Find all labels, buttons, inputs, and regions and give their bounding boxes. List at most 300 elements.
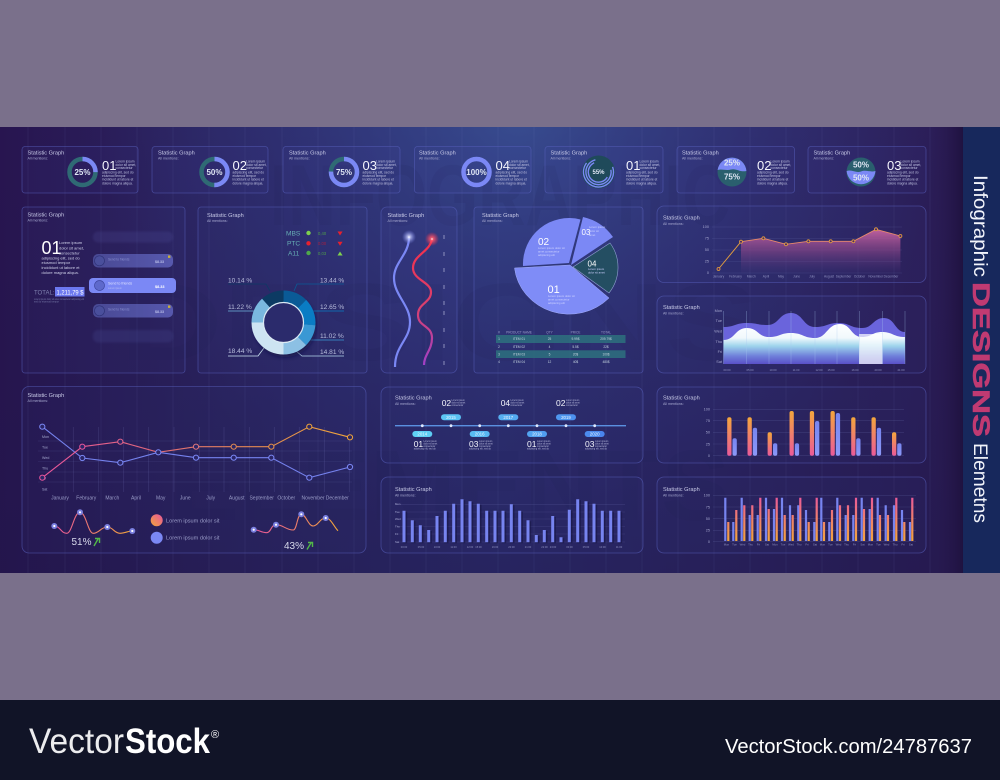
footer logo: ® — [211, 729, 219, 741]
line chart: December — [326, 496, 349, 502]
milestone texts: 02 — [442, 398, 451, 408]
year pills: 2018 — [532, 432, 542, 437]
thin bars: Fri — [853, 543, 857, 547]
line chart: March — [105, 496, 119, 502]
text block 01: adipiscing elit, sed do — [102, 170, 134, 174]
bars: 16:00 — [492, 545, 499, 549]
text block 01: incididunt ut labore et — [42, 265, 80, 270]
product table: 3 — [498, 352, 500, 356]
text block 01: dolore magna aliqua. — [626, 181, 657, 185]
thin bars: Thu — [748, 543, 753, 547]
product table: ITEM 03 — [513, 352, 525, 356]
wave gauge 50% 50%: 50% — [853, 160, 869, 170]
donut 75%: 75% — [336, 168, 352, 177]
product table: TOTAL — [601, 330, 611, 334]
wave gauge 25% 75%: 75% — [724, 172, 740, 182]
text block 04: eiusmod tempor — [496, 174, 520, 178]
donut 25%: 25% — [74, 168, 91, 177]
panel: wave gauge 25/75: All mentions: — [682, 156, 703, 160]
text block 02: 02 — [757, 158, 771, 173]
thin bars — [704, 494, 916, 547]
legend: Lorem ipsum dolor sit — [166, 536, 220, 542]
text block 01: dolor sit amet, — [640, 163, 660, 167]
product table: 1 — [498, 337, 500, 341]
panel: ring 25%: Statistic Graph — [28, 150, 64, 156]
area chart: 100 — [703, 225, 709, 229]
top grey band — [0, 0, 1000, 127]
text block 01: consectetur — [116, 166, 133, 170]
pie chart: 01 — [548, 284, 560, 296]
panel: area line chart — [657, 206, 926, 282]
pie chart: 03 — [582, 228, 591, 237]
milestone texts: consectetur — [537, 445, 549, 448]
status table — [286, 230, 343, 258]
panel: wave chart: All mentions: — [663, 312, 684, 316]
list row 2: $8.33 — [155, 260, 164, 264]
product table: 5.5$ — [572, 345, 579, 349]
thin bars: Mon — [820, 543, 826, 547]
text block 03: dolore magna aliqua. — [887, 181, 918, 185]
bars — [395, 499, 625, 549]
right sidebar with vertical title: DESIGNS — [967, 282, 994, 437]
pie chart: Lorem ipsum dolor sit — [538, 246, 565, 250]
thin bars: 100 — [704, 494, 710, 498]
ghost background lettering: ELEMENTS — [170, 430, 730, 542]
text block 02: incididunt ut labore et — [757, 178, 788, 182]
text block 01: dolore magna aliqua. — [42, 270, 79, 275]
panel: bar chart single series: Statistic Graph — [395, 487, 432, 493]
year pills: 2019 — [561, 415, 571, 420]
status table: 0,03 — [318, 251, 327, 256]
milestone texts — [414, 398, 609, 450]
product table: 25 — [548, 337, 551, 341]
wave gauge 50% 50%: 50% — [853, 174, 869, 182]
tick marks — [443, 235, 445, 365]
product table: 209.79$ — [600, 337, 612, 341]
text block 03: consectetur — [376, 166, 394, 170]
thin bars: Wed — [884, 543, 890, 547]
thin bars: Wed — [788, 543, 794, 547]
lower grey band — [0, 573, 1000, 700]
thin bars: Thu — [797, 543, 802, 547]
line chart: January — [51, 496, 69, 502]
product table: 100$ — [602, 352, 610, 356]
milestone texts: Lorem ipsum — [510, 399, 524, 402]
bars: Tue — [395, 510, 400, 514]
area chart: August — [824, 274, 834, 278]
text block 01: consectetur — [59, 250, 80, 256]
thin bars: Sat — [860, 543, 865, 547]
panel: wave gauge 25/75: Statistic Graph — [682, 150, 719, 156]
line chart: August — [229, 496, 245, 502]
area chart: December — [884, 274, 899, 278]
donut percent labels — [228, 278, 344, 356]
total value: TOTAL: — [34, 290, 55, 296]
donut percent labels: 12.65 % — [320, 304, 344, 311]
text block 01: 01 — [42, 238, 62, 258]
thin bars: Fri — [805, 543, 809, 547]
panel: line chart with sparklines — [22, 386, 366, 553]
product table: ITEM 02 — [513, 345, 525, 349]
panel: ring 50% — [152, 146, 268, 193]
text block 01: incididunt ut labore et — [626, 178, 657, 182]
product table: PRICE — [571, 330, 580, 334]
panel: pie chart and table: All mentions: — [482, 219, 503, 223]
text block 01: Lorem ipsum — [640, 160, 659, 164]
thin bars: Thu — [893, 543, 898, 547]
milestone texts: adipiscing elit, sed do — [585, 448, 608, 450]
area chart: April — [763, 274, 769, 278]
area chart: 0 — [707, 271, 709, 275]
text block 02: eiusmod tempor — [757, 174, 782, 178]
area chart: February — [729, 274, 742, 278]
list row 2 — [93, 254, 173, 268]
total value — [34, 287, 84, 304]
line chart: September — [249, 496, 274, 502]
footer logo — [29, 722, 219, 761]
panel: ring 25%: All mentions: — [28, 156, 48, 160]
milestone texts: dolor sit amet — [424, 442, 438, 446]
text block 01: adipiscing elit, sed do — [626, 170, 658, 174]
donut percent labels: 13.44 % — [320, 278, 344, 284]
product table: 5 — [549, 352, 551, 356]
right sidebar with vertical title — [930, 127, 1000, 573]
product table: 9.99$ — [572, 337, 580, 341]
milestone texts: 03 — [585, 439, 595, 449]
panel: ring 75% — [283, 146, 400, 193]
paired bars: 25 — [706, 442, 710, 446]
panel: wavy lines — [381, 207, 457, 373]
list row active — [89, 278, 176, 293]
text block 03: Lorem ipsum — [900, 160, 920, 164]
donut percent labels: 11.22 % — [228, 304, 252, 311]
product table: PRODUCT NAME — [506, 330, 532, 334]
area chart — [703, 225, 902, 278]
thin bars: Sat — [765, 543, 769, 547]
area chart: November — [868, 274, 884, 278]
panel: timeline: All mentions: — [395, 402, 416, 406]
product table: 20$ — [573, 352, 578, 356]
pie chart: amet consectetur — [538, 250, 560, 254]
donut percent labels: 11.02 % — [320, 333, 344, 340]
line chart — [38, 424, 353, 502]
text block 02: adipiscing elit, sed do — [232, 170, 264, 174]
footer image id: VectorStock.com/24787637 — [725, 736, 972, 758]
panel: bar chart single series — [381, 477, 643, 553]
footer bar — [0, 700, 1000, 780]
bars: Mon — [395, 502, 401, 506]
milestone texts: Lorem ipsum — [424, 440, 437, 443]
milestone texts: dolor sit amet — [510, 402, 525, 404]
list row faded top — [93, 232, 173, 242]
panel: donut chart: All mentions: — [207, 219, 228, 223]
area chart: January — [713, 274, 725, 278]
text block 01: Lorem ipsum — [59, 240, 83, 245]
wave area chart: Thu — [715, 340, 722, 344]
line chart: Tue — [42, 445, 48, 449]
wave area chart: 05:00 — [746, 368, 754, 372]
milestone texts: 03 — [469, 439, 479, 449]
bars: Wed — [395, 517, 401, 521]
thin bars: Tue — [876, 543, 881, 547]
sparkline 43% — [251, 511, 338, 552]
product table: QTY — [546, 330, 554, 334]
wave area chart: Tue — [716, 319, 722, 323]
product table: 22$ — [603, 345, 609, 349]
panel: list with total: All mentions: — [28, 218, 48, 222]
footer logo: Stock — [125, 722, 210, 761]
pie chart: Lorem ipsum dolor sit — [548, 294, 575, 298]
list row 4 — [93, 304, 173, 318]
product table: 40$ — [573, 360, 578, 364]
product table: ITEM 04 — [513, 360, 525, 364]
panel: line chart with sparklines: All mentions: — [28, 399, 48, 403]
wave area chart: 21:00 — [898, 368, 905, 372]
bars: 10:00 — [599, 545, 606, 549]
text block 01 — [42, 238, 84, 275]
donut percent labels: 14.81 % — [320, 349, 344, 356]
line chart: Wed — [42, 456, 49, 460]
text block 01: eiusmod tempor — [42, 260, 71, 265]
panel: area line chart: Statistic Graph — [663, 216, 700, 222]
text block 04: 04 — [496, 158, 510, 173]
text block 01: dolore magna aliqua. — [102, 181, 133, 185]
milestone texts: 01 — [527, 439, 537, 449]
panel: concentric ring 55%: All mentions: — [550, 156, 571, 160]
line chart: November — [301, 496, 325, 502]
milestone texts: Lorem ipsum — [595, 440, 608, 443]
panel: area line chart: All mentions: — [663, 222, 684, 226]
bars: 23:00 — [550, 545, 557, 549]
line chart: Thu — [42, 466, 48, 470]
milestone texts: 02 — [556, 398, 566, 408]
list row active: Lorem ipsum — [108, 287, 122, 290]
panel: line chart with sparklines: Statistic Graph — [28, 393, 64, 399]
milestone texts: Lorem ipsum — [537, 440, 550, 443]
text block 04: Lorem ipsum — [509, 160, 528, 164]
text block 01: eiusmod tempor — [102, 174, 127, 178]
text block 02: dolor sit amet, — [770, 163, 791, 167]
right sidebar with vertical title: Elemetns — [969, 443, 990, 523]
milestone texts: consectetur — [566, 404, 578, 407]
text block 02: Lorem ipsum — [246, 160, 265, 164]
panel: paired rounded bars — [657, 387, 926, 463]
milestone texts: consectetur — [479, 445, 491, 448]
text block 03: adipiscing elit, sed do — [362, 170, 394, 174]
wavy blue line — [394, 230, 416, 367]
area chart: October — [854, 274, 866, 278]
text block 02: 02 — [232, 158, 247, 173]
text block 02: consectetur — [246, 166, 264, 170]
wave area chart: 10:00 — [770, 368, 777, 372]
total value: sed do eiusmod tempor — [34, 300, 59, 304]
area chart: May — [778, 274, 784, 278]
legend: Lorem ipsum dolor sit — [166, 518, 220, 524]
text block 04: adipiscing elit, sed do — [496, 170, 527, 174]
milestone texts: Lorem ipsum — [452, 399, 465, 402]
status table: PTC — [287, 240, 300, 248]
pie chart: adipiscing elit — [538, 253, 555, 257]
panel: wave gauge 25/75 — [677, 146, 794, 193]
panel: ring 25% — [22, 146, 138, 193]
panel: list with total: Statistic Graph — [28, 212, 64, 218]
status table: 0,40 — [318, 231, 327, 236]
sparkline 51%: 51% — [72, 537, 92, 548]
panel: wave gauge 50/50: All mentions: — [814, 156, 834, 160]
text block 03: incididunt ut labore et — [362, 178, 394, 182]
text block 03: dolor sit amet, — [900, 163, 921, 167]
area chart: 50 — [705, 248, 709, 252]
thin bars: Mon — [772, 543, 778, 547]
line chart: April — [131, 496, 141, 502]
text block 03: eiusmod tempor — [887, 174, 912, 178]
wave area chart: 16:00 — [852, 368, 859, 372]
ghost background lettering: INFOGRAPHIC — [270, 148, 730, 244]
line chart: Mon — [42, 435, 49, 439]
status table: A11 — [288, 250, 300, 258]
thin bars: 0 — [708, 540, 710, 544]
thin bars: 25 — [706, 529, 710, 533]
text block 01: Lorem ipsum — [116, 160, 135, 164]
milestone texts: 01 — [414, 439, 423, 449]
text block 01: 01 — [626, 158, 640, 173]
donut chart — [247, 286, 320, 359]
ghost background lettering: DESIGNS — [120, 261, 760, 384]
thin bars: Mon — [868, 543, 874, 547]
text block 02 — [757, 158, 791, 185]
list row 4: Send to friends — [108, 308, 130, 312]
text block 04: dolor sit amet, — [509, 163, 530, 167]
wave area chart: Sat — [716, 360, 723, 364]
text block 03: adipiscing elit, sed do — [887, 170, 919, 174]
status table: MBS — [286, 230, 301, 238]
text block 01: adipiscing elit, sed do — [42, 256, 81, 260]
ghost background lettering — [120, 148, 760, 542]
thin bars: Tue — [828, 543, 833, 547]
wave gauge 25% 75% — [718, 158, 746, 186]
wave area chart: Wed — [714, 330, 722, 334]
text block 01: dolor sit amet, — [59, 246, 84, 250]
panel: donut chart: Statistic Graph — [207, 213, 244, 219]
footer logo: Vector — [29, 722, 124, 761]
area chart: 25 — [705, 260, 709, 264]
paired bars: 75 — [706, 419, 710, 423]
text block 01 — [102, 158, 136, 185]
panel: concentric ring 55%: Statistic Graph — [550, 150, 587, 156]
bars: 05:00 — [583, 545, 590, 549]
donut percent labels: 10.14 % — [228, 278, 252, 284]
paired bars — [704, 408, 904, 458]
product table: 2 — [498, 345, 500, 349]
panel: timeline — [381, 387, 643, 463]
legend — [151, 514, 220, 544]
area chart: March — [747, 274, 756, 278]
donut 100%: 100% — [466, 168, 487, 177]
product table: 4 — [498, 360, 500, 364]
text block 02: incididunt ut labore et — [232, 178, 264, 182]
right sidebar with vertical title: Infographic — [969, 175, 990, 277]
text block 03: 03 — [887, 158, 901, 173]
text block 03: incididunt ut labore et — [887, 178, 918, 182]
year pills: 2014 — [417, 432, 428, 437]
milestone texts: 04 — [501, 398, 510, 408]
area chart: September — [836, 274, 852, 278]
bars: 10:00 — [434, 545, 441, 549]
thin bars: 75 — [706, 505, 710, 509]
pie chart: adipiscing elit — [548, 301, 565, 305]
concentric gauge: 55% — [592, 170, 605, 176]
text block 02: adipiscing elit, sed do — [757, 170, 789, 174]
pie chart: 02 — [538, 237, 550, 248]
thin bars: Sat — [909, 543, 913, 547]
bars: 22:00 — [541, 545, 548, 549]
text block 03: 03 — [362, 158, 377, 173]
total value: 1,211,79 $ — [56, 290, 84, 296]
panel: pie chart and table — [474, 207, 643, 373]
list row active: $8.33 — [155, 285, 165, 289]
thin bars: Sat — [813, 543, 817, 547]
line chart: July — [206, 496, 216, 502]
pie chart: dolor sit — [589, 229, 599, 233]
thin bars: Wed — [836, 543, 842, 547]
line chart: October — [277, 496, 296, 502]
milestone texts: dolor sit amet — [452, 402, 466, 404]
pie chart: Lorem ipsum — [589, 225, 606, 229]
panel: wavy lines: Statistic Graph — [388, 213, 424, 219]
line chart: February — [76, 496, 97, 502]
milestone texts: consectetur — [595, 445, 607, 448]
bars: 11:00 — [616, 545, 623, 549]
panel: thin paired bars — [657, 477, 926, 553]
wave area chart: 15:00 — [828, 368, 835, 372]
text block 01: 01 — [102, 158, 116, 173]
bars: Thu — [395, 524, 400, 528]
milestone texts: consectetur — [452, 404, 464, 407]
year pills: 2016 — [475, 432, 485, 437]
year pills: 2020 — [590, 432, 600, 437]
text block 04: dolore magna aliqua. — [496, 181, 526, 185]
paired bars: 100 — [704, 408, 710, 412]
product table: 480$ — [602, 360, 610, 364]
text block 02: eiusmod tempor — [232, 174, 257, 178]
text block 01: consectetur — [640, 166, 657, 170]
sparkline 51% — [51, 509, 135, 548]
area chart: June — [793, 274, 800, 278]
panel: ring 50%: All mentions: — [158, 156, 179, 160]
text block 01: dolor sit amet, — [116, 163, 136, 167]
donut 50%: 50% — [206, 168, 223, 177]
text block 02 — [232, 158, 267, 185]
milestone texts: adipiscing elit, sed do — [414, 448, 436, 450]
text block 01: eiusmod tempor — [626, 174, 651, 178]
text block 03: dolor sit amet, — [376, 163, 397, 167]
dashboard background — [0, 127, 1000, 573]
year pills: 2015 — [446, 415, 456, 420]
wave area chart: 11:00 — [793, 368, 800, 372]
bars: 05:00 — [418, 545, 425, 549]
bars: Fri — [395, 532, 399, 536]
panel: timeline: Statistic Graph — [395, 396, 432, 402]
thin bars: Fri — [757, 543, 761, 547]
milestone texts: consectetur — [510, 404, 523, 407]
text block 03 — [362, 158, 397, 185]
line chart: May — [156, 496, 166, 502]
pie chart: amet consectetur — [548, 298, 570, 302]
wave area chart: 20:00 — [874, 368, 882, 372]
milestone texts: dolor sit amet — [479, 442, 493, 446]
product table: 4 — [549, 345, 551, 349]
line chart: Fri — [42, 476, 46, 480]
